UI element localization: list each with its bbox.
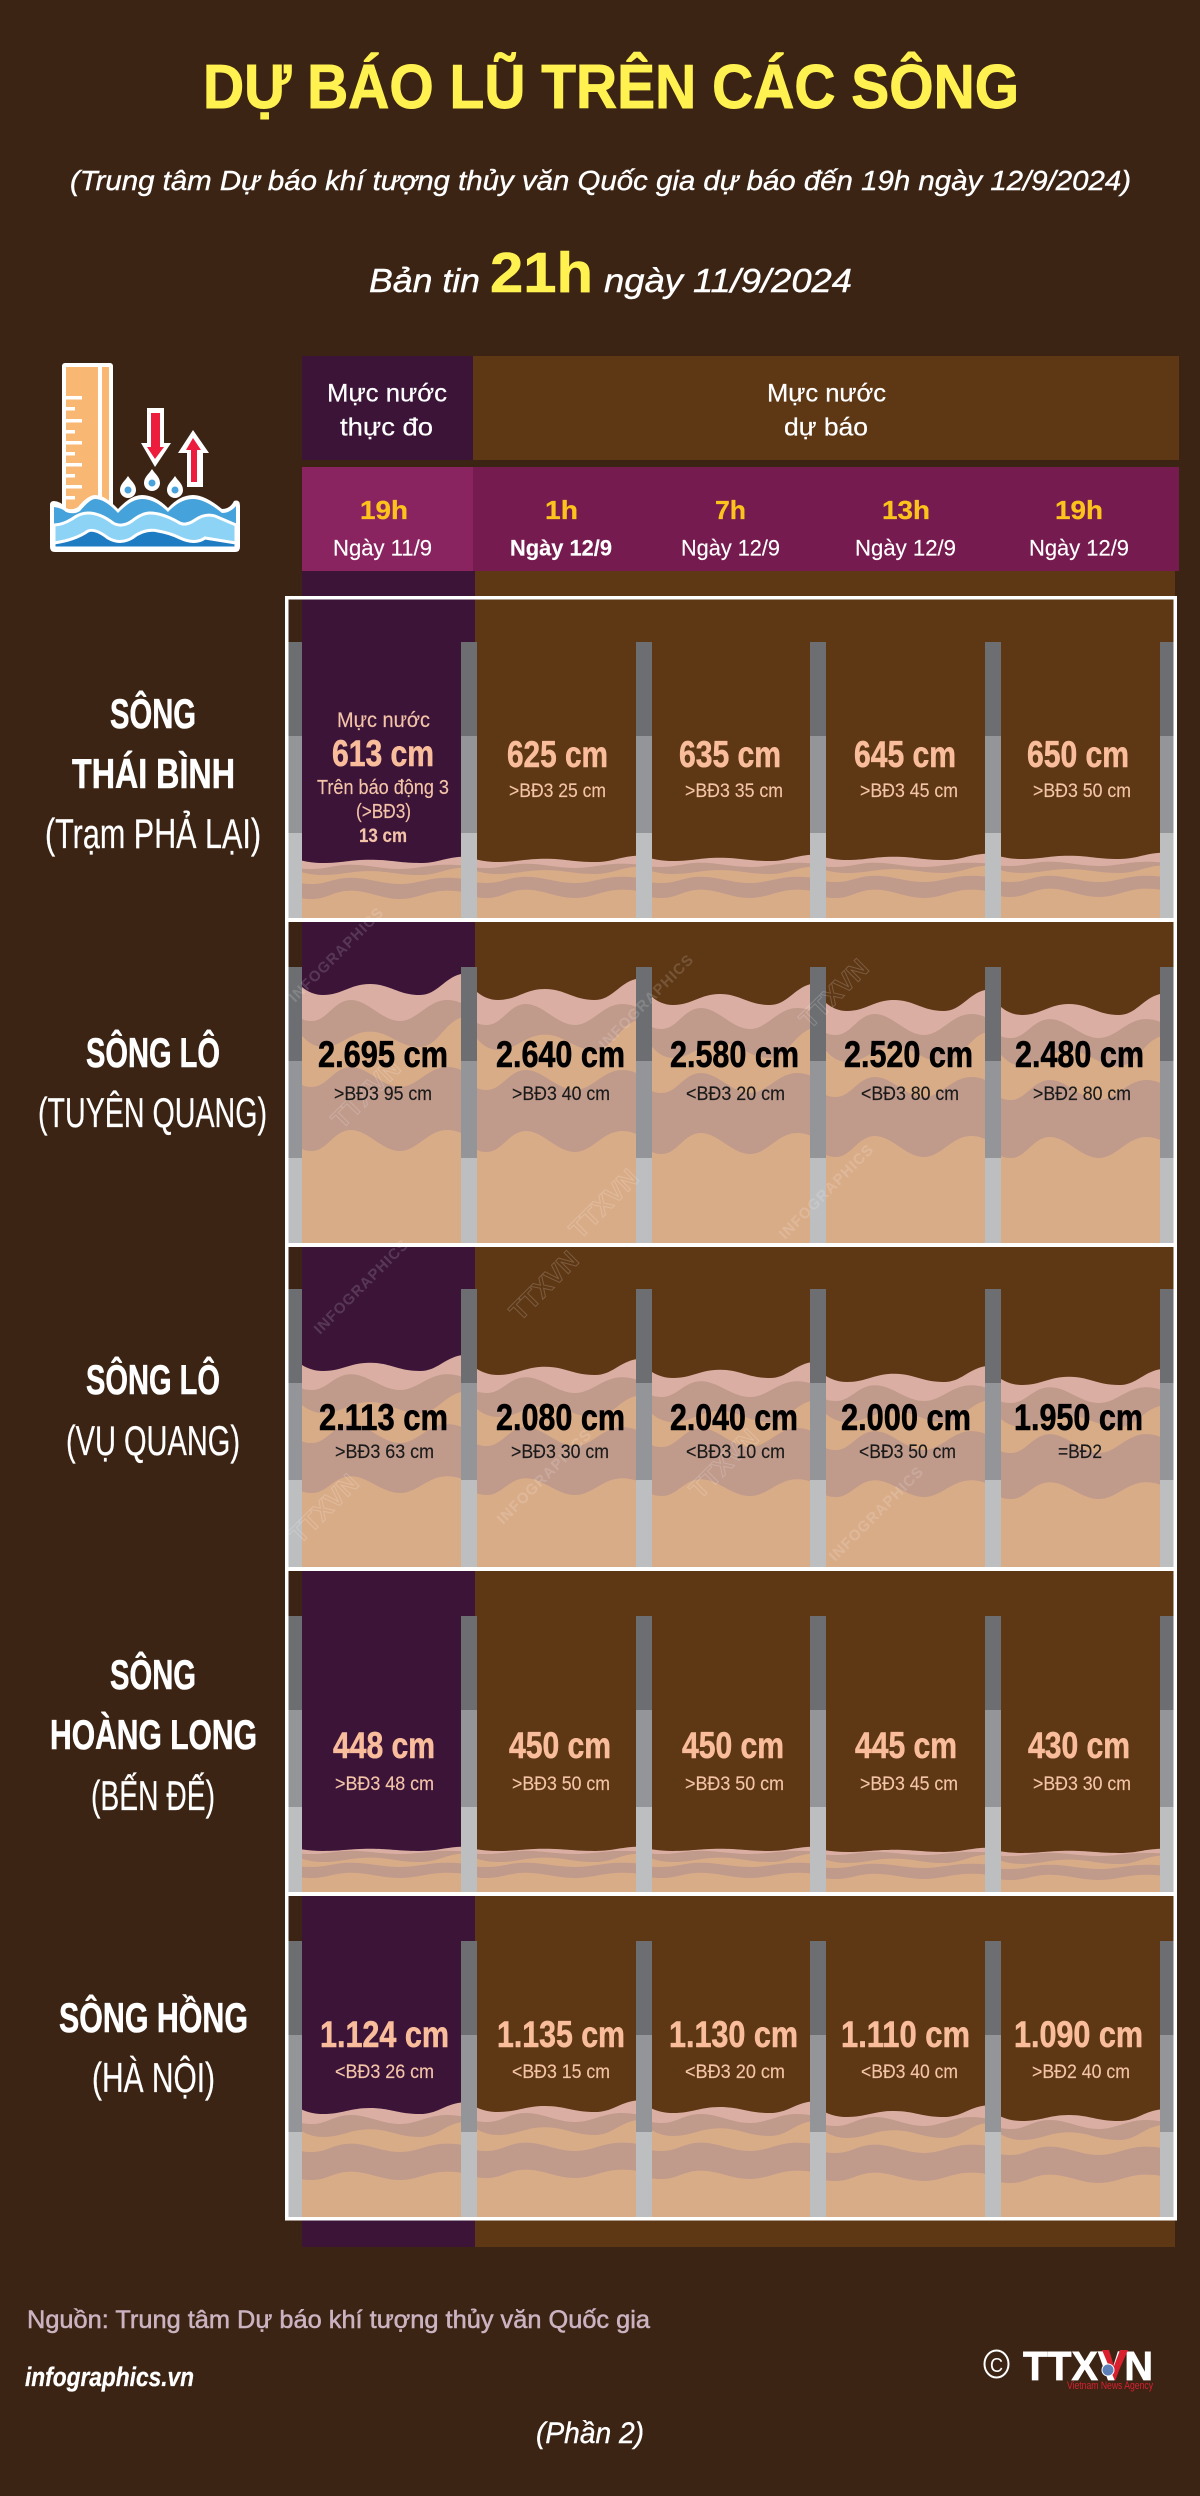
bulletin time line: 21h xyxy=(490,241,593,305)
row 4 values: >BĐ3 50 cm xyxy=(512,1774,610,1795)
bulletin time line: Bản tin xyxy=(369,262,480,299)
row 3 label: Sông Lô Vụ Quang: (VỤ QUANG) xyxy=(66,1417,240,1464)
row 5 values: 1.130 cm xyxy=(669,2014,798,2055)
panel: column backgrounds xyxy=(302,571,1175,2247)
header: forecast times: 19h xyxy=(1055,495,1103,525)
row 1 values: >BĐ3 45 cm xyxy=(860,781,958,802)
row 3 values: 2.080 cm xyxy=(496,1397,625,1438)
website: infographics.vn xyxy=(25,2362,194,2392)
row 1 label: Sông Thái Bình: SÔNG xyxy=(110,689,196,737)
text: TTXVN xyxy=(283,1468,365,1549)
row 5 label: Sông Hồng: SÔNG HỒNG xyxy=(59,1993,248,2041)
text: INFOGRAPHICS xyxy=(494,1426,596,1528)
row 4 values: 445 cm xyxy=(855,1725,957,1766)
row 1 label: Sông Thái Bình: THÁI BÌNH xyxy=(72,750,235,797)
row 3 values: =BĐ2 xyxy=(1058,1442,1102,1463)
row 2 label: Sông Lô Tuyên Quang: (TUYÊN QUANG) xyxy=(38,1089,267,1136)
row 3 water levels xyxy=(286,1289,1176,1763)
row 4 label: Sông Hoàng Long xyxy=(50,1650,257,1819)
logo: TTXVN: TTXVN xyxy=(1023,2343,1153,2389)
header: measured time 19h 11/9: 19h xyxy=(360,495,408,525)
row 5 values: >BĐ2 40 cm xyxy=(1032,2062,1130,2083)
icon: water gauge with arrows and waves xyxy=(50,363,240,552)
logo: TTXVN: Vietnam News Agency xyxy=(1067,2380,1153,2392)
text: TTXVN xyxy=(683,1423,765,1504)
row 5 values: 1.090 cm xyxy=(1014,2014,1143,2055)
row 1 label: Sông Thái Bình xyxy=(45,689,261,857)
row 3 values: >BĐ3 30 cm xyxy=(511,1442,609,1463)
row 2 values: 2.695 cm xyxy=(318,1034,448,1075)
row 1 values: 645 cm xyxy=(854,734,956,775)
row 3 label: Sông Lô Vụ Quang: SÔNG LÔ xyxy=(86,1355,220,1403)
row 2 values: 2.480 cm xyxy=(1015,1034,1144,1075)
text: TTXVN xyxy=(325,1053,407,1134)
row 5 values: 1.110 cm xyxy=(841,2014,970,2055)
title: DỰ BÁO LŨ TRÊN CÁC SÔNG xyxy=(203,53,1019,122)
row 4 values: >BĐ3 48 cm xyxy=(335,1774,434,1795)
header: measured time 19h 11/9: Ngày 11/9 xyxy=(333,536,432,560)
header: forecast water level: Mực nước xyxy=(767,380,886,408)
header: forecast times xyxy=(473,467,1179,571)
bulletin time line: ngày 11/9/2024 xyxy=(604,262,852,299)
header: forecast times: 1h xyxy=(545,495,578,525)
row 2 values: 2.640 cm xyxy=(496,1034,625,1075)
row 4 water levels xyxy=(286,1616,1176,1996)
row 2 values: 2.520 cm xyxy=(844,1034,973,1075)
row 4 label: Sông Hoàng Long: HOÀNG LONG xyxy=(50,1711,257,1758)
row 4 values xyxy=(333,1725,1131,1795)
header: measured time 19h 11/9 xyxy=(302,467,473,571)
row 4 values: >BĐ3 45 cm xyxy=(860,1774,958,1795)
row 1 values: 625 cm xyxy=(507,734,608,775)
row 4 values: >BĐ3 30 cm xyxy=(1033,1774,1131,1795)
row 3 values: <BĐ3 50 cm xyxy=(859,1442,956,1463)
row 1 values: Mực nước xyxy=(337,709,430,732)
row 1 values: 13 cm xyxy=(359,826,407,847)
header: forecast times: Ngày 12/9 xyxy=(855,536,956,560)
frame lines xyxy=(285,596,1177,2220)
row 1 values: (>BĐ3) xyxy=(356,801,411,823)
row 5 values xyxy=(320,2014,1143,2083)
row 1 values: Trên báo động 3 xyxy=(317,777,449,799)
row 2 values: >BĐ3 95 cm xyxy=(334,1084,432,1105)
row 2 label: Sông Lô Tuyên Quang xyxy=(38,1028,267,1136)
header: forecast times: Ngày 12/9 xyxy=(1029,536,1129,560)
row 3 values: 1.950 cm xyxy=(1014,1397,1143,1438)
row 5 label: Sông Hồng: (HÀ NỘI) xyxy=(92,2054,215,2101)
text: INFOGRAPHICS xyxy=(286,904,388,1006)
row 2 values xyxy=(318,1034,1144,1105)
row 3 values: 2.040 cm xyxy=(670,1397,798,1438)
text: INFOGRAPHICS xyxy=(826,1463,928,1565)
row 3 values: 2.113 cm xyxy=(319,1397,448,1438)
row 4 values: 450 cm xyxy=(682,1725,784,1766)
row 4 values: 430 cm xyxy=(1028,1725,1130,1766)
row 2 label: Sông Lô Tuyên Quang: SÔNG LÔ xyxy=(86,1028,220,1076)
subtitle: (Trung tâm Dự báo khí tượng thủy văn Quốc gia dự báo đến 19h ngày 12/9/2024) xyxy=(70,165,1131,196)
row 1 values: >BĐ3 25 cm xyxy=(509,781,606,802)
header: forecast water level: dự báo xyxy=(784,414,868,442)
row 2 values: 2.580 cm xyxy=(670,1034,799,1075)
row 2 values: <BĐ3 80 cm xyxy=(861,1084,959,1105)
row 1 values: >BĐ3 50 cm xyxy=(1033,781,1131,802)
source note: Nguồn: Trung tâm Dự báo khí tượng thủy văn Quốc gia xyxy=(27,2306,650,2334)
row 1 values: 613 cm xyxy=(332,733,434,774)
logo: TTXVN: C xyxy=(990,2355,1003,2377)
text: INFOGRAPHICS xyxy=(311,1236,413,1338)
row 2 values: >BĐ2 80 cm xyxy=(1033,1084,1131,1105)
row 5 water levels xyxy=(286,1941,1176,2371)
row 1 values: 635 cm xyxy=(679,734,781,775)
row 5 values: 1.135 cm xyxy=(497,2014,625,2055)
row 5 values: <BĐ3 40 cm xyxy=(861,2062,958,2083)
bulletin time line xyxy=(369,241,852,305)
text: TTXVN xyxy=(793,953,875,1034)
row 3 values: 2.000 cm xyxy=(841,1397,971,1438)
row 4 values: 450 cm xyxy=(509,1725,611,1766)
text: INFOGRAPHICS xyxy=(776,1141,878,1243)
row 5 label: Sông Hồng xyxy=(59,1993,248,2101)
row 1 values: 650 cm xyxy=(1027,734,1129,775)
header: measured water level: thực đo xyxy=(340,414,433,442)
row 3 values: <BĐ3 10 cm xyxy=(686,1442,785,1463)
row 1 water levels xyxy=(286,642,1176,1031)
part number: (Phần 2) xyxy=(536,2417,644,2450)
header: forecast times: Ngày 12/9 xyxy=(510,536,612,560)
row 1 values: >BĐ3 35 cm xyxy=(685,781,783,802)
row 3 values: >BĐ3 63 cm xyxy=(335,1442,434,1463)
text: INFOGRAPHICS xyxy=(596,951,698,1053)
header: forecast times: Ngày 12/9 xyxy=(681,536,780,560)
header: forecast water level xyxy=(473,356,1179,460)
row 5 values: <BĐ3 26 cm xyxy=(335,2062,434,2083)
text: TTXVN xyxy=(563,1163,645,1244)
row 1 values xyxy=(317,709,1131,847)
header: measured water level: Mực nước xyxy=(327,380,447,408)
row 4 values: 448 cm xyxy=(333,1725,435,1766)
row 4 label: Sông Hoàng Long: SÔNG xyxy=(110,1650,196,1698)
header: forecast times: 13h xyxy=(882,495,930,525)
row 1 label: Sông Thái Bình: (Trạm PHẢ LẠI) xyxy=(45,809,261,857)
row 3 label: Sông Lô Vụ Quang xyxy=(66,1355,240,1464)
row 3 values xyxy=(319,1397,1143,1463)
row 5 values: <BĐ3 15 cm xyxy=(512,2062,610,2083)
header: forecast times: 7h xyxy=(715,495,746,525)
row 2 water levels xyxy=(288,967,1174,1243)
row 5 values: 1.124 cm xyxy=(320,2014,449,2055)
row 2 values: >BĐ3 40 cm xyxy=(512,1084,610,1105)
row 5 values: <BĐ3 20 cm xyxy=(685,2062,785,2083)
header: measured water level xyxy=(302,356,473,460)
row 4 label: Sông Hoàng Long: (BẾN ĐẾ) xyxy=(91,1772,215,1819)
text: TTXVN xyxy=(503,1245,585,1326)
row 2 values: <BĐ3 20 cm xyxy=(686,1084,785,1105)
row 4 values: >BĐ3 50 cm xyxy=(685,1774,784,1795)
